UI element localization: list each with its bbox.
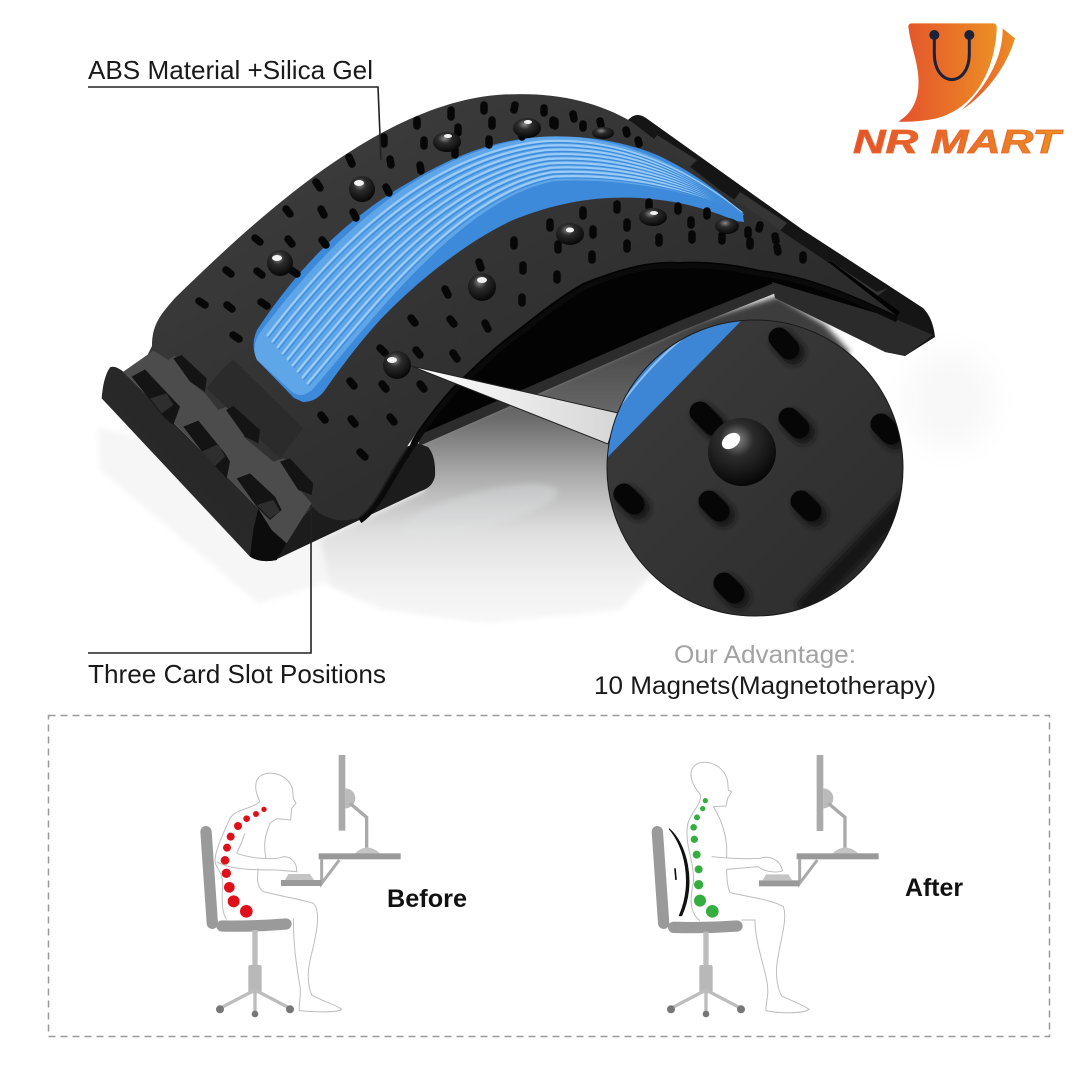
under-arch shadow (392, 250, 900, 492)
advantage heading: Our Advantage: (674, 641, 856, 669)
logo: NR MART (853, 23, 1064, 160)
desk and monitor (281, 755, 401, 886)
panel: before and after posture (48, 716, 1050, 1036)
base plate, right foot (772, 282, 933, 356)
callout cone from magnet to magnified lens (411, 366, 618, 444)
pad ribs, dark (268, 143, 744, 386)
after figure (657, 755, 879, 1017)
label: card slots (88, 505, 386, 689)
blue silicone pad (254, 136, 744, 402)
enlarged nubs (624, 338, 891, 593)
magnified lens detail (600, 320, 912, 618)
top plate with massage nubs (140, 94, 897, 520)
base plate, front part (240, 443, 435, 560)
base support strip (418, 288, 775, 441)
logo bag (898, 23, 1015, 122)
dark plate edge (794, 490, 900, 609)
advantage text: 10 Magnets(Magnetotherapy) (594, 672, 936, 700)
product: back stretcher (102, 94, 935, 561)
card slot tray (102, 351, 313, 561)
massage nubs (199, 105, 803, 457)
shadow under product (97, 296, 995, 622)
pad ribs, light (267, 141, 742, 384)
right rail (628, 115, 935, 356)
magnets (267, 118, 739, 379)
label: ABS material (88, 55, 381, 160)
label: card slots: Three Card Slot Positions (88, 659, 386, 689)
tray front bar (102, 367, 287, 561)
tray corner (250, 508, 287, 561)
before figure (206, 755, 401, 1017)
body outline (215, 773, 342, 1012)
chair (206, 832, 294, 1017)
nub shadows (628, 342, 895, 597)
enlarged magnet (708, 418, 776, 486)
plate lip edge (360, 266, 897, 521)
magnet highlights (272, 120, 658, 363)
tray top surface (123, 351, 313, 543)
label recess (207, 359, 303, 458)
label: ABS material: ABS Material +Silica Gel (88, 55, 373, 85)
chair with stretcher (657, 829, 745, 1017)
blue pad wedge (608, 321, 741, 457)
body outline (687, 762, 809, 1013)
slot notches (132, 355, 313, 520)
desk and monitor (759, 755, 879, 886)
label: After: After (905, 874, 963, 902)
logo wordmark: NR MART (853, 123, 1064, 160)
red spine dots (221, 807, 267, 918)
label: Before: Before (387, 885, 467, 913)
slot inner blocks (150, 393, 280, 518)
green spine dots (690, 798, 719, 918)
